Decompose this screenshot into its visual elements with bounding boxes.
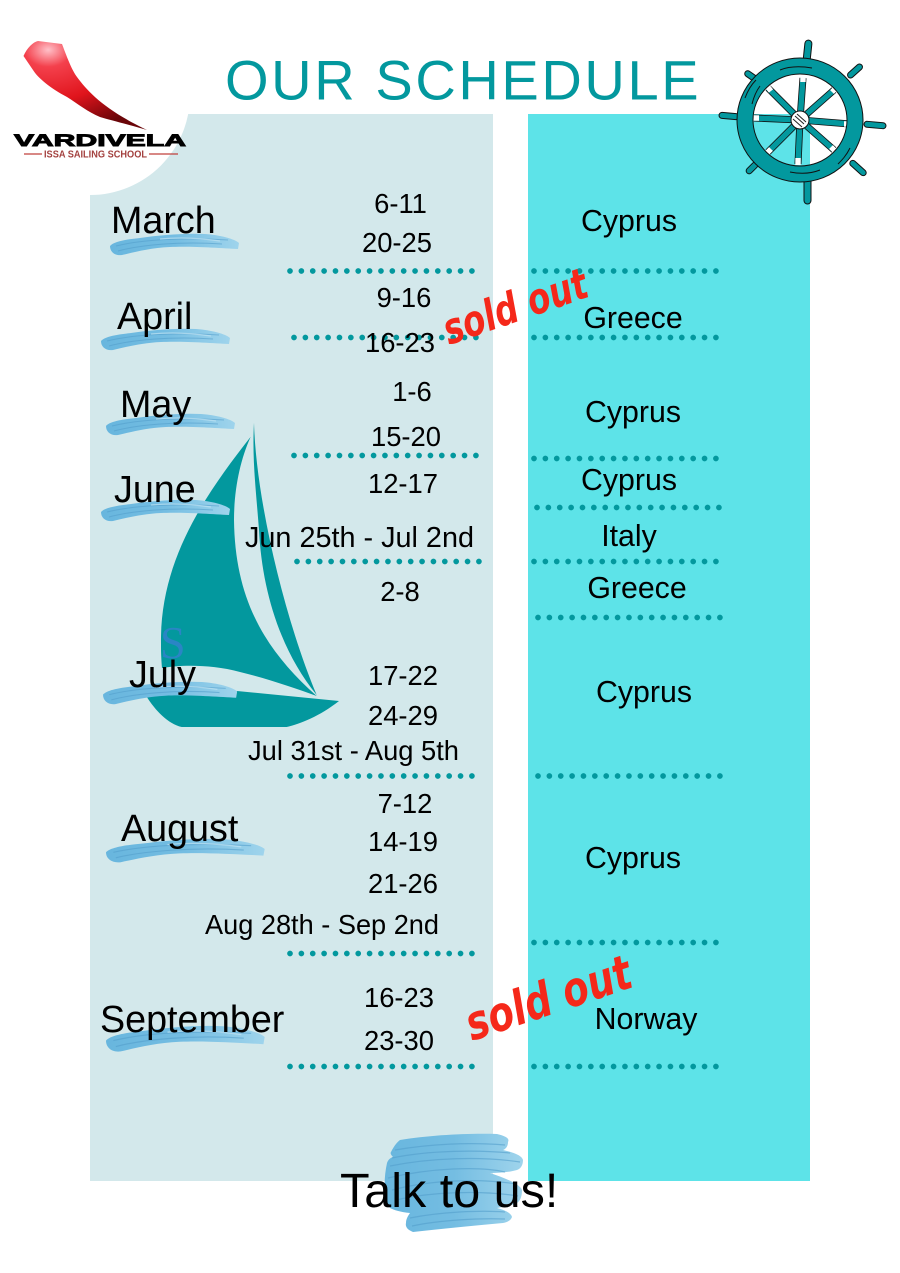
dates: May: 15-20 bbox=[371, 421, 441, 452]
panel: dates bbox=[90, 114, 493, 1181]
month: July: July bbox=[129, 653, 196, 695]
dates: May bbox=[371, 376, 441, 452]
locations: Cyprus bbox=[585, 396, 681, 429]
dates: April: 16-23 bbox=[365, 327, 435, 358]
logo: VARDIVELA bbox=[14, 131, 186, 150]
locations: Greece bbox=[587, 572, 687, 605]
month: June: June bbox=[114, 468, 196, 510]
callout: sold out (September): sold out bbox=[458, 944, 640, 1052]
dates: August: 21-26 bbox=[368, 868, 438, 899]
dates: August: 7-12 bbox=[378, 788, 432, 819]
dates: September bbox=[364, 982, 434, 1056]
dates: August: 14-19 bbox=[368, 826, 438, 857]
locations bbox=[581, 205, 698, 1036]
locations: Cyprus bbox=[581, 464, 677, 497]
faint letter on sail: S bbox=[160, 617, 186, 668]
dates: July: 24-29 bbox=[368, 700, 438, 731]
callout: sold out (April): sold out bbox=[436, 259, 595, 355]
dates: March: 6-11 bbox=[374, 188, 427, 219]
month: April: April bbox=[117, 295, 192, 337]
logo: ISSA SAILING SCHOOL bbox=[44, 148, 148, 160]
call to action: Talk to us! bbox=[340, 1164, 558, 1218]
locations: Cyprus bbox=[581, 205, 677, 238]
month: August: August bbox=[121, 807, 239, 849]
dates: July: 2-8 bbox=[380, 576, 420, 607]
locations: Cyprus bbox=[585, 842, 681, 875]
icon: ship wheel bbox=[719, 40, 886, 204]
dotted dividers: dates bbox=[290, 271, 483, 1066]
month: June bbox=[101, 468, 230, 521]
locations: Greece bbox=[583, 302, 683, 335]
dates: June: 12-17 bbox=[368, 468, 438, 499]
dates: July bbox=[248, 576, 459, 766]
locations: Norway bbox=[595, 1003, 698, 1036]
dates: August: Aug 28th - Sep 2nd bbox=[205, 909, 439, 940]
month: May bbox=[106, 383, 235, 435]
locations: Cyprus bbox=[596, 676, 692, 709]
dates: August bbox=[205, 788, 439, 940]
dates: April: 9-16 bbox=[377, 282, 431, 313]
dates: June: Jun 25th - Jul 2nd bbox=[245, 522, 474, 554]
panel: locations bbox=[528, 114, 810, 1181]
dotted dividers: locations bbox=[534, 271, 724, 1066]
month: April bbox=[101, 295, 230, 350]
dates: March: 20-25 bbox=[362, 227, 432, 258]
logo bbox=[0, 0, 190, 195]
month: July bbox=[103, 653, 237, 704]
dates: June bbox=[245, 468, 474, 554]
month: March bbox=[110, 199, 239, 255]
month: May: May bbox=[120, 383, 191, 425]
dates: July: 17-22 bbox=[368, 660, 438, 691]
dates: September: 16-23 bbox=[364, 982, 434, 1013]
title: OUR SCHEDULE bbox=[225, 48, 701, 111]
month: September: September bbox=[100, 998, 284, 1040]
dates: July: Jul 31st - Aug 5th bbox=[248, 735, 459, 766]
icon: sailboat bbox=[147, 423, 339, 727]
locations: Italy bbox=[601, 520, 658, 553]
month: March: March bbox=[111, 199, 216, 241]
call to action bbox=[340, 1134, 558, 1232]
dates: May: 1-6 bbox=[392, 376, 432, 407]
month: August bbox=[106, 807, 265, 862]
dates: September: 23-30 bbox=[364, 1025, 434, 1056]
dates: March bbox=[362, 188, 432, 258]
dates: April bbox=[365, 282, 435, 358]
